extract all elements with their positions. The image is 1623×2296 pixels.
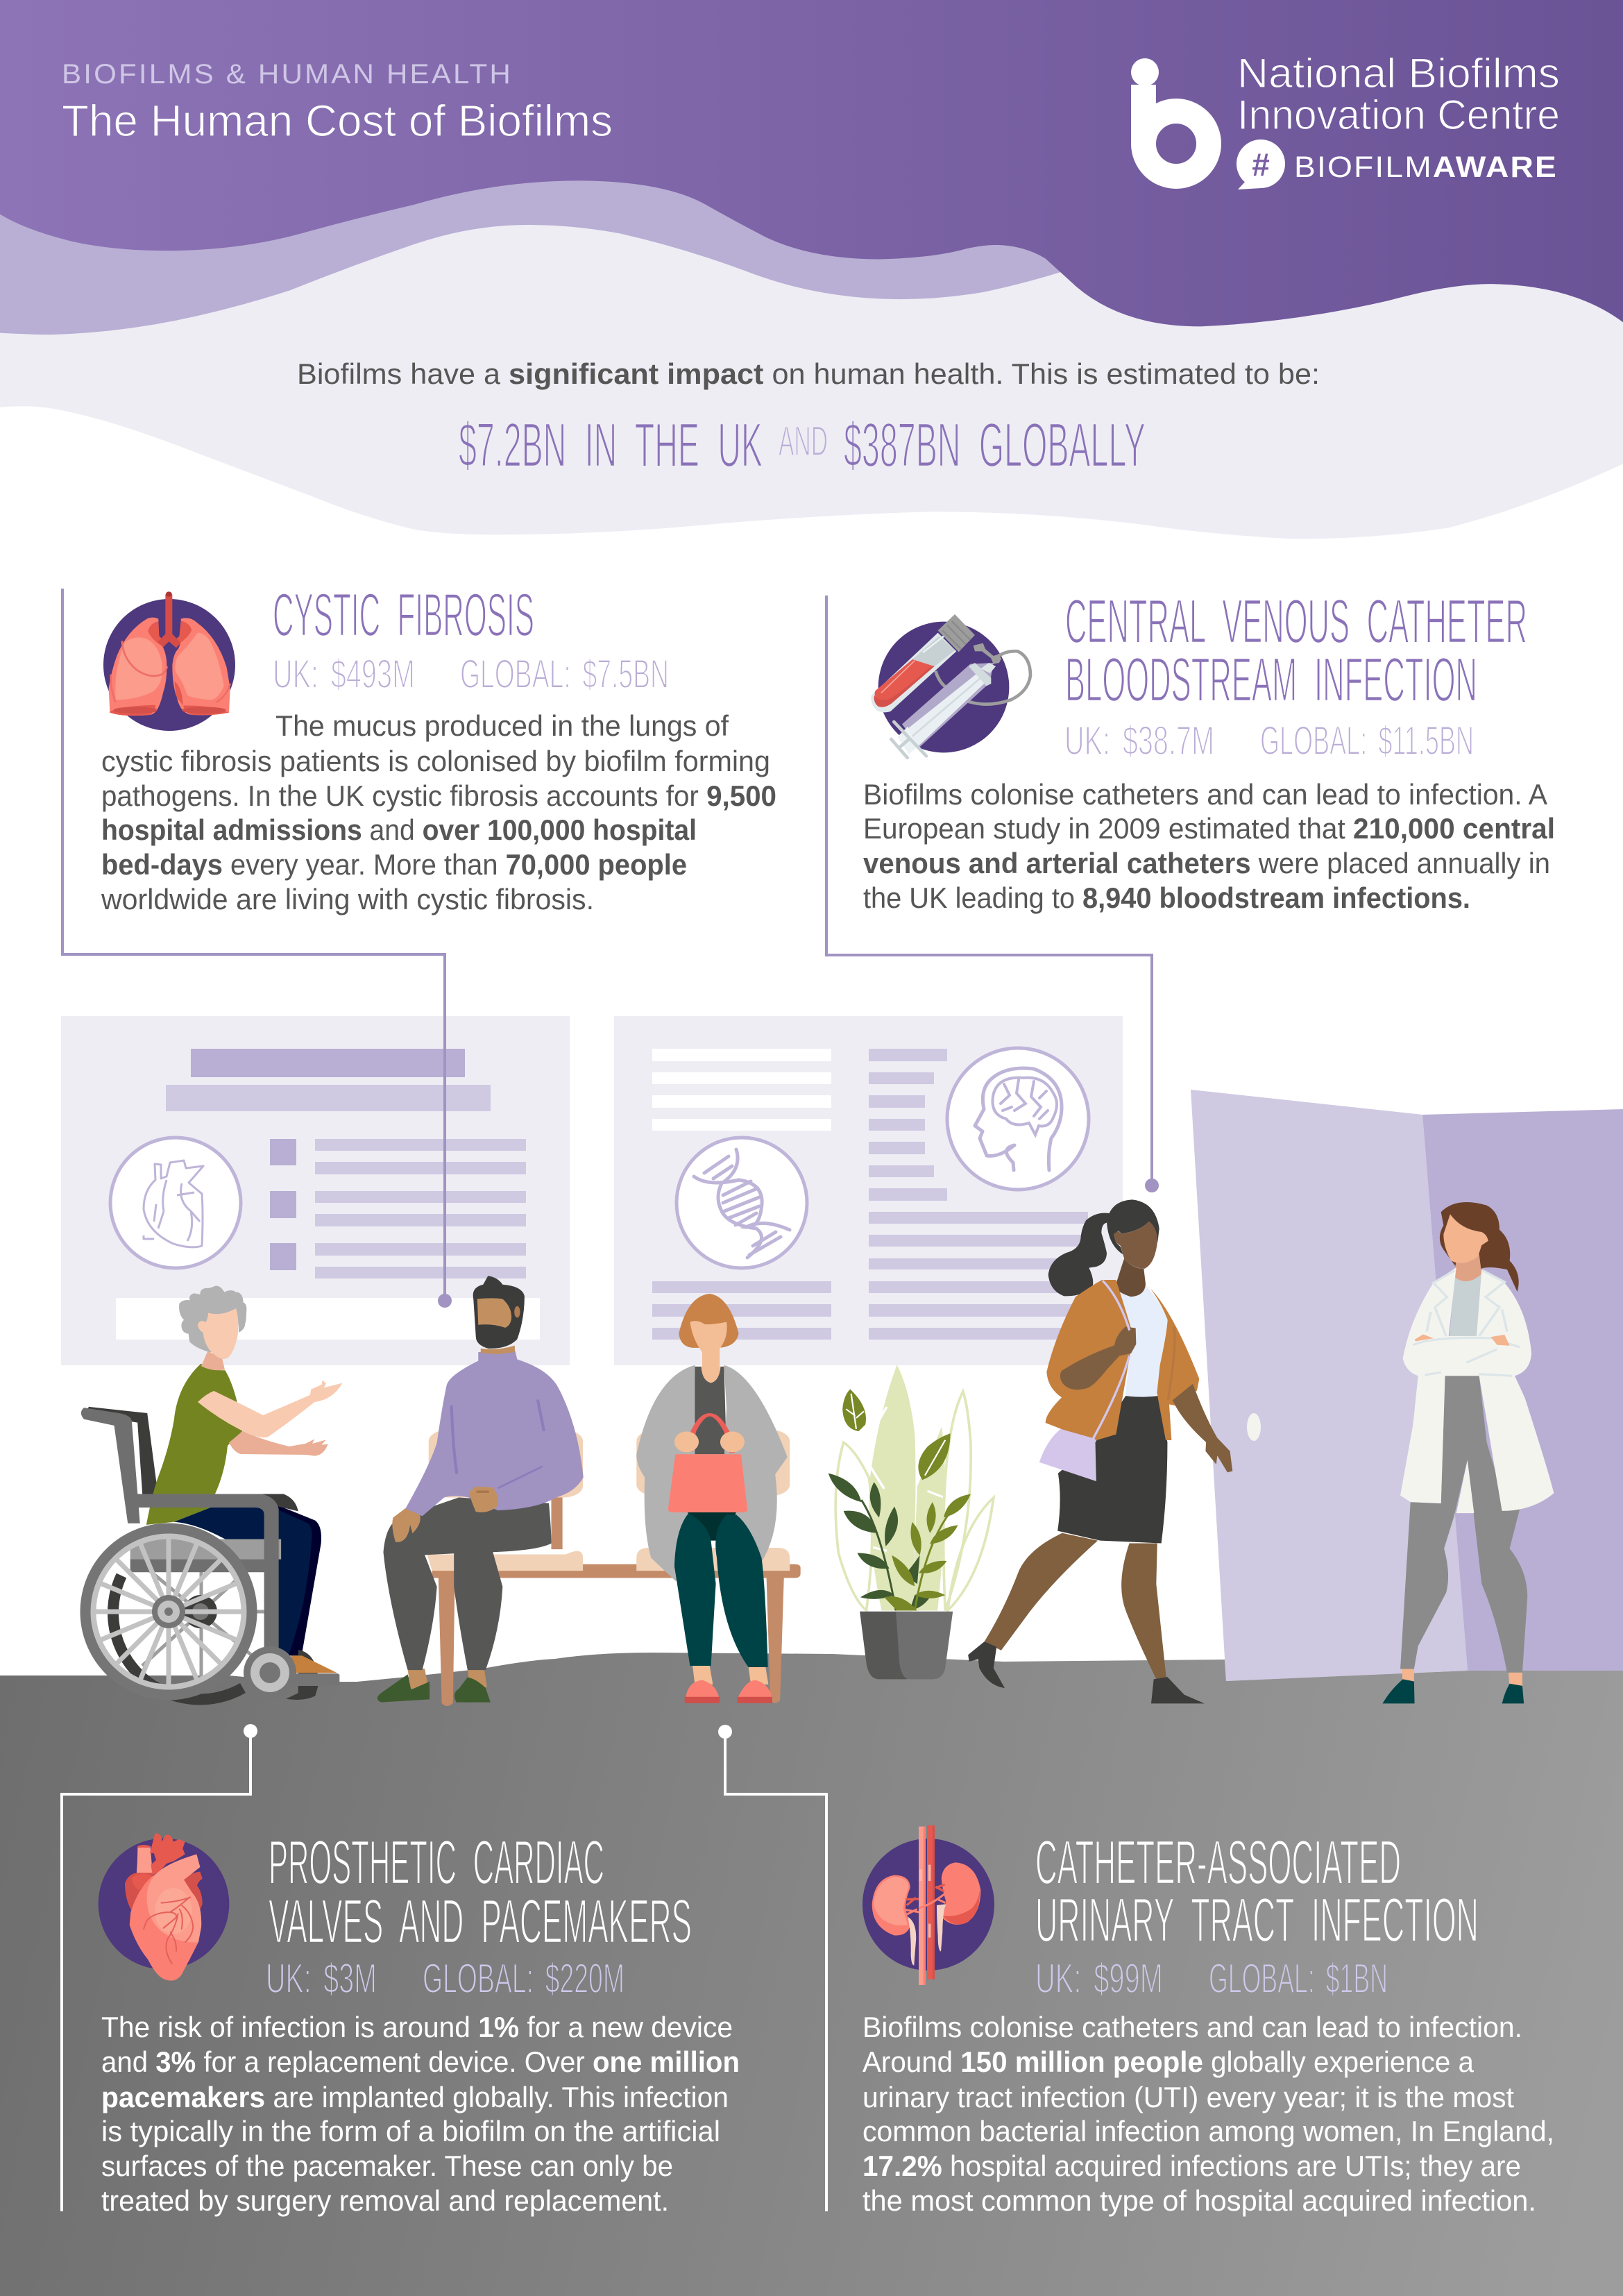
logo wordmark: Innovation Centre xyxy=(1237,92,1560,138)
headline figures: $7.2BN IN THE UK xyxy=(459,411,763,480)
seat xyxy=(130,1539,281,1560)
header title: The Human Cost of Biofilms xyxy=(62,96,613,146)
cost figures xyxy=(273,652,669,697)
cost figures: UK: $3M xyxy=(266,1955,377,2002)
neck xyxy=(201,1351,225,1370)
trousers xyxy=(1400,1374,1527,1673)
body text: cystic fibrosis patients is colonised by biofilm forming xyxy=(101,745,770,777)
logo mark ib xyxy=(1131,58,1209,176)
hashtag text: BIOFILM AWARE xyxy=(1294,151,1558,184)
right arm xyxy=(1173,1384,1232,1472)
figure: person in wheelchair xyxy=(81,1286,342,1700)
light purple wave xyxy=(0,142,1061,335)
bag xyxy=(1039,1429,1096,1481)
body text xyxy=(863,2011,1554,2217)
body text: pacemakers are implanted globally. This infection xyxy=(101,2081,729,2113)
cost figures xyxy=(1035,1955,1388,2002)
trousers xyxy=(383,1497,551,1670)
body text: the UK leading to 8,940 bloodstream infections. xyxy=(863,881,1470,914)
body text: and 3% for a replacement device. Over one million xyxy=(101,2045,740,2078)
panel: prosthetic cardiac valves xyxy=(99,1828,740,2217)
cost figures xyxy=(266,1955,624,2002)
front wheel xyxy=(84,1527,253,1696)
face xyxy=(477,1298,511,1328)
heading: PROSTHETIC CARDIAC xyxy=(269,1828,604,1898)
skirt xyxy=(1057,1396,1167,1543)
arm xyxy=(1060,1327,1136,1390)
background lavender wave xyxy=(0,0,1623,539)
top xyxy=(1119,1285,1168,1396)
top xyxy=(692,1367,726,1454)
hair and beard xyxy=(473,1276,525,1349)
lab coat xyxy=(1400,1267,1554,1511)
legs xyxy=(985,1533,1166,1679)
cost figures: UK: $493M xyxy=(273,652,415,697)
hands xyxy=(392,1487,498,1542)
icon: DNA xyxy=(677,1138,807,1268)
body text: common bacterial infection among women, In England, xyxy=(863,2115,1554,2147)
heading xyxy=(1035,1828,1479,1955)
body text: The risk of infection is around 1% for a new device xyxy=(101,2011,733,2043)
body text xyxy=(863,778,1555,914)
header band xyxy=(0,0,1623,326)
logo xyxy=(1131,50,1560,189)
handbag xyxy=(690,1415,732,1453)
poster right xyxy=(614,1016,1123,1365)
body text: European study in 2009 estimated that 210,000 central xyxy=(863,812,1555,845)
plant xyxy=(829,1365,994,1679)
panel: cystic fibrosis xyxy=(101,580,776,915)
door handle xyxy=(1247,1413,1261,1441)
heading xyxy=(1065,587,1527,715)
body text: pathogens. In the UK cystic fibrosis accounts for 9,500 xyxy=(101,779,776,812)
connector: central venous catheter xyxy=(826,596,1159,1192)
body text: worldwide are living with cystic fibrosis. xyxy=(101,883,594,915)
panel: catheter-associated urinary tract infection xyxy=(863,1825,1554,2217)
cardigan crease xyxy=(1168,1327,1175,1400)
connector: cystic fibrosis xyxy=(62,589,452,1308)
body text: venous and arterial catheters were placed annually in xyxy=(863,847,1550,879)
icon: lungs xyxy=(103,591,235,731)
face xyxy=(702,1348,720,1368)
figure: walking woman xyxy=(968,1199,1232,1703)
face xyxy=(1114,1222,1157,1269)
panel: central venous catheter xyxy=(863,587,1555,914)
chair back xyxy=(84,1407,158,1494)
body text: treated by surgery removal and replacement. xyxy=(101,2184,669,2217)
cardigan xyxy=(636,1365,788,1584)
icon: brain head xyxy=(947,1048,1089,1190)
cardigan xyxy=(1046,1280,1199,1442)
body text: The mucus produced in the lungs of xyxy=(275,709,729,742)
body text: Biofilms colonise catheters and can lead to infection. xyxy=(863,2011,1522,2043)
upper arm xyxy=(198,1380,342,1437)
hashtag bubble xyxy=(1237,140,1285,189)
strap xyxy=(1093,1281,1130,1439)
olive leaves xyxy=(842,1389,971,1610)
icon: heart outline xyxy=(110,1138,241,1268)
pots xyxy=(860,1612,953,1679)
body text: 17.2% hospital acquired infections are UTIs; they are xyxy=(863,2150,1521,2182)
body text: urinary tract infection (UTI) every year; it is the most xyxy=(863,2081,1514,2113)
connector: catheter-associated UTI xyxy=(718,1725,826,2211)
hair xyxy=(1440,1202,1519,1292)
trousers xyxy=(688,1512,736,1541)
lower arm xyxy=(229,1431,328,1456)
icon: vial and syringe xyxy=(871,614,1030,758)
bench xyxy=(427,1430,801,1706)
poster left xyxy=(61,1016,570,1365)
cost figures xyxy=(1064,718,1474,763)
heading xyxy=(269,1828,692,1957)
icon: kidneys xyxy=(863,1825,994,1985)
dark leaves xyxy=(829,1474,930,1610)
body text: bed-days every year. More than 70,000 people xyxy=(101,848,687,881)
cost figures: GLOBAL: $7.5BN xyxy=(460,652,669,697)
coat creases and hands xyxy=(1413,1270,1520,1376)
figure: seated man xyxy=(377,1276,584,1703)
body text: surfaces of the pacemaker. These can only be xyxy=(101,2150,673,2182)
caster wheel xyxy=(244,1646,296,1699)
ankles and shoes xyxy=(692,1665,768,1685)
hashtag bubble: # xyxy=(1252,146,1270,183)
head hair xyxy=(1107,1199,1159,1254)
headline figures: $387BN GLOBALLY xyxy=(844,411,1146,480)
trousers xyxy=(276,1505,321,1655)
body text xyxy=(101,709,776,915)
intro sentence: Biofilms have a significant impact on human health. This is estimated to be: xyxy=(297,357,1320,390)
figure: doctor xyxy=(1382,1202,1554,1703)
body text: the most common type of hospital acquired infection. xyxy=(863,2184,1536,2217)
cost figures: UK: $38.7M xyxy=(1064,718,1214,763)
body text: is typically in the form of a biofilm on the artificial xyxy=(101,2115,720,2147)
hair xyxy=(179,1286,246,1352)
figure: seated woman xyxy=(636,1294,788,1703)
ankles and shoes xyxy=(1402,1664,1522,1688)
panel: cystic fibrosis: CYSTIC FIBROSIS xyxy=(273,580,534,649)
cost figures: GLOBAL: $11.5BN xyxy=(1260,718,1474,763)
headline figures: AND xyxy=(779,418,828,464)
logo wordmark xyxy=(1237,50,1560,138)
pale leaves xyxy=(835,1365,994,1610)
wheelchair back wheel xyxy=(113,1537,278,1699)
shoes xyxy=(968,1641,1205,1703)
ponytail xyxy=(1048,1213,1110,1296)
face xyxy=(198,1308,238,1359)
body text: hospital admissions and over 100,000 hospital xyxy=(101,813,697,846)
armrest frame xyxy=(262,1494,298,1511)
head and arms xyxy=(179,1286,342,1456)
panel: prosthetic cardiac valves: VALVES AND PACEMAKERS xyxy=(269,1887,692,1957)
door xyxy=(1191,1090,1623,1681)
header eyebrow: BIOFILMS & HUMAN HEALTH xyxy=(62,59,513,90)
face xyxy=(1443,1214,1488,1263)
cost figures: GLOBAL: $220M xyxy=(423,1955,624,2002)
body text: Biofilms colonise catheters and can lead to infection. A xyxy=(863,778,1547,811)
cost figures: UK: $99M xyxy=(1035,1955,1163,2002)
neck and top xyxy=(1446,1270,1481,1376)
shoe and footrest xyxy=(286,1650,318,1700)
sweater xyxy=(405,1349,584,1516)
shirt xyxy=(146,1364,242,1525)
hands xyxy=(674,1432,699,1452)
neck xyxy=(1115,1258,1146,1297)
body text xyxy=(101,2011,740,2217)
cost figures: GLOBAL: $1BN xyxy=(1209,1955,1388,2002)
connector: prosthetic cardiac valves xyxy=(62,1724,257,2211)
floor xyxy=(0,1653,1623,2296)
ankles and shoes xyxy=(408,1669,487,1689)
logo wordmark: National Biofilms xyxy=(1237,50,1560,96)
hair xyxy=(679,1294,739,1348)
icon: heart xyxy=(99,1833,229,1981)
body text: Around 150 million people globally experience a xyxy=(863,2045,1475,2078)
